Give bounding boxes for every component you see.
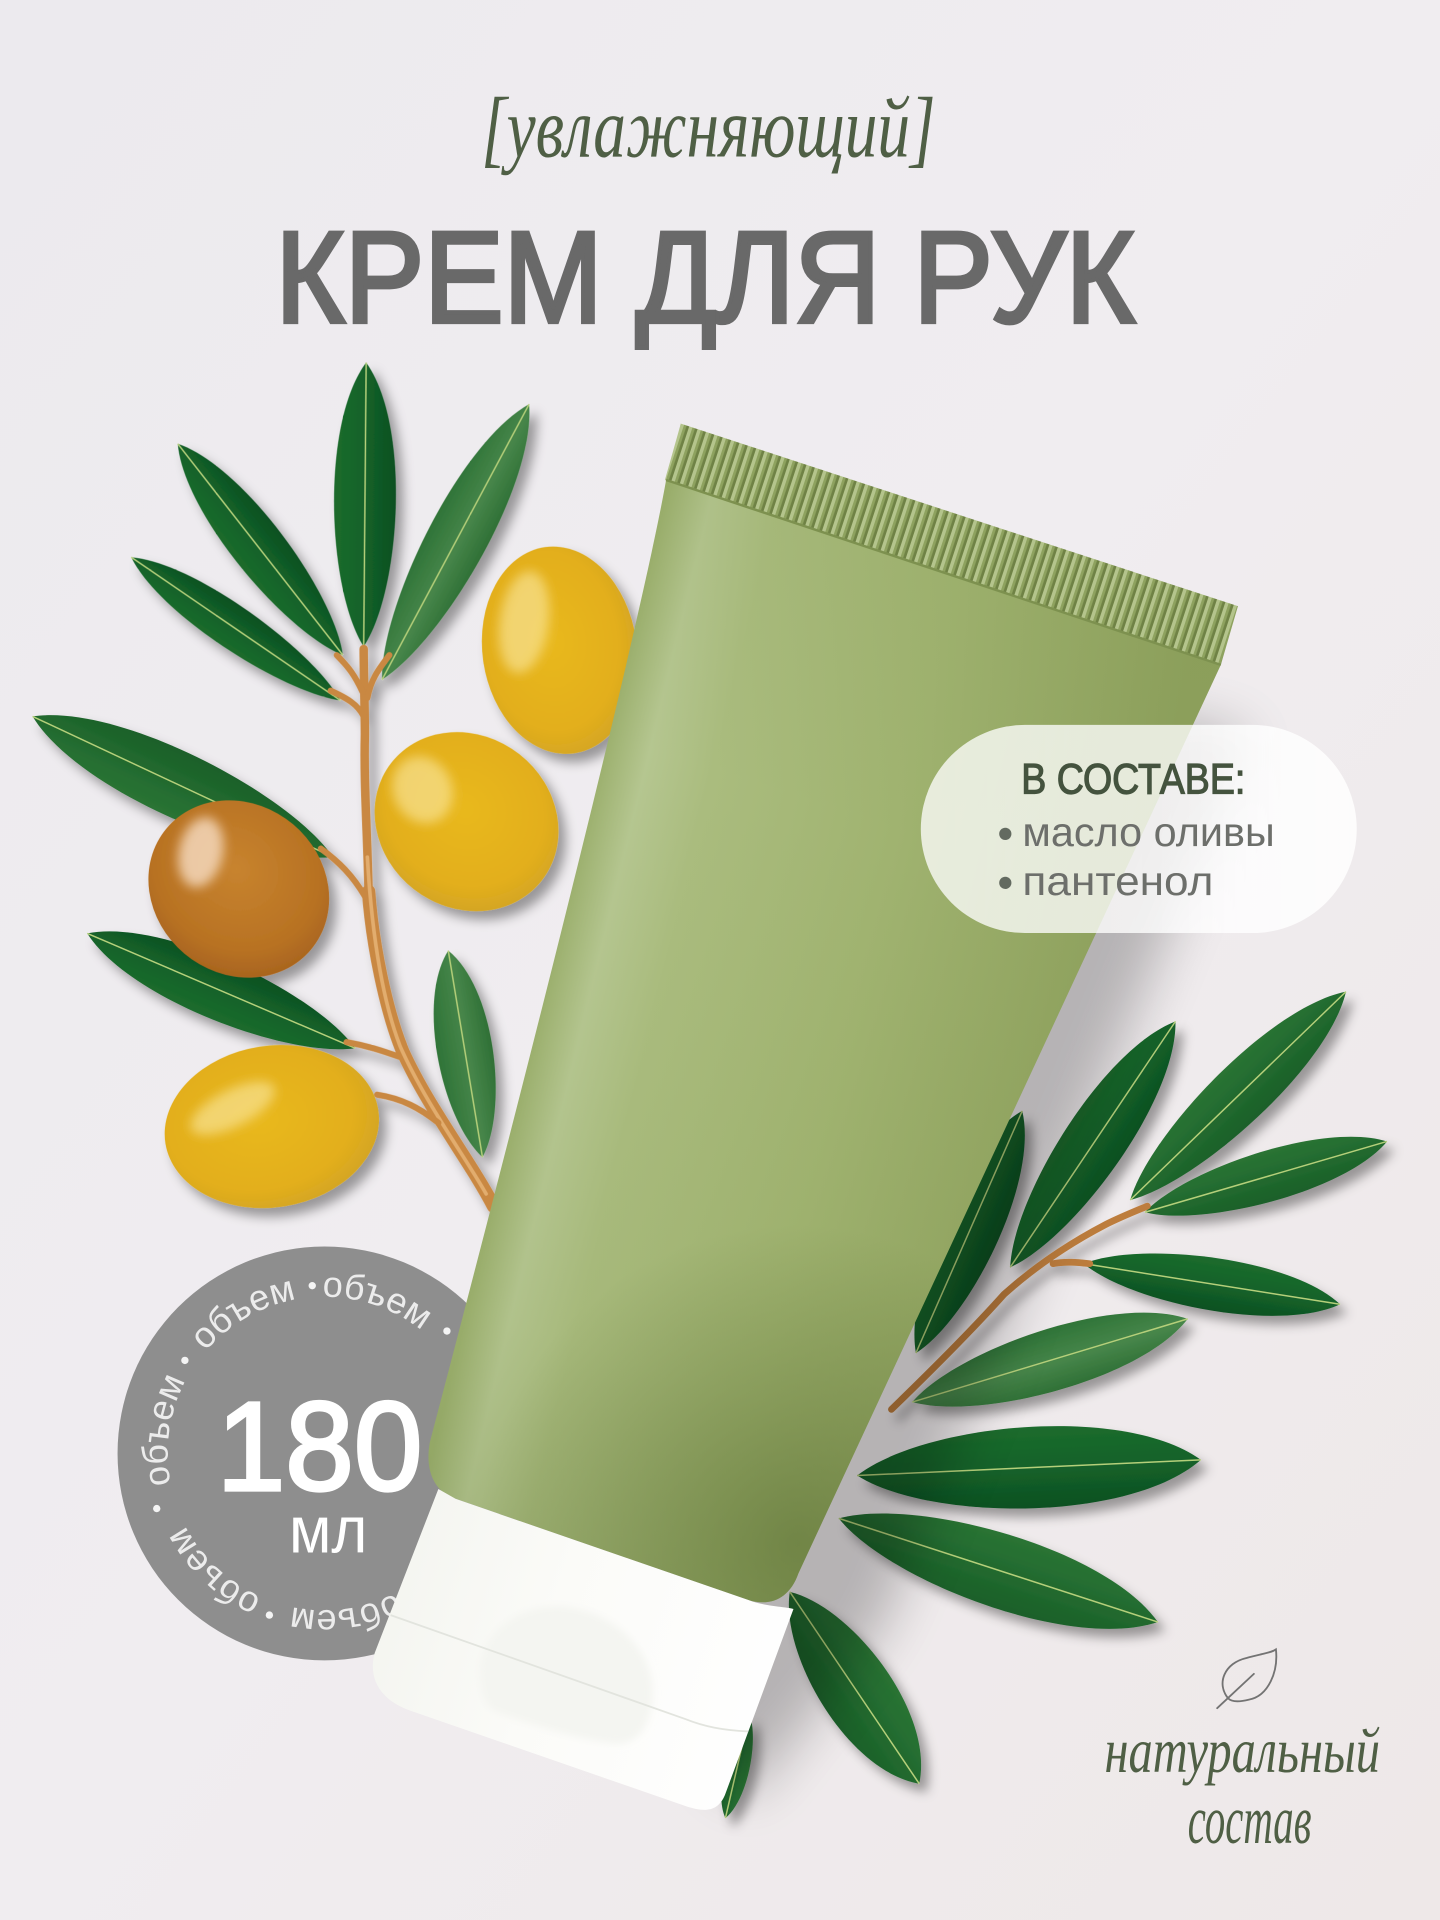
leaf: left xyxy=(119,539,353,718)
stem: left branch xyxy=(321,649,493,1206)
badge: volume 180 ml: мл xyxy=(289,1494,367,1568)
leaf: under cap xyxy=(713,1712,761,1821)
leaf: behind tube xyxy=(889,1099,1050,1365)
olive: bottom xyxy=(153,1030,391,1223)
leaf: bottom xyxy=(760,1572,949,1804)
tube cap xyxy=(373,1489,793,1810)
badge: volume 180 ml: объем xyxy=(170,1528,258,1612)
callout: ingredients: пантенол xyxy=(1022,858,1213,904)
stem: right branch xyxy=(891,1206,1147,1409)
leaf: lower xyxy=(827,1483,1169,1657)
cream tube xyxy=(428,424,1238,1602)
leaf: long left xyxy=(19,686,347,887)
cap thumb notch xyxy=(480,1606,653,1744)
leaf: upper left xyxy=(157,428,364,671)
callout: ingredients xyxy=(921,725,1357,933)
caption: natural composition: состав xyxy=(1188,1782,1311,1858)
badge: volume 180 ml: 180 xyxy=(217,1376,422,1517)
badge: volume 180 ml: объем xyxy=(196,1281,294,1348)
caption: natural composition xyxy=(1104,1715,1380,1858)
badge: volume 180 ml: объем xyxy=(292,1596,396,1632)
olive: brown xyxy=(112,764,365,1014)
tube shadow xyxy=(490,637,1249,1800)
leaf: pale middle xyxy=(903,1289,1197,1432)
leaf: top centre xyxy=(333,362,397,647)
olive branch: right xyxy=(713,971,1394,1821)
icon: leaf outline xyxy=(1217,1649,1276,1708)
olive: top right xyxy=(469,536,650,764)
leaf: small right xyxy=(421,946,510,1162)
leaf: far right xyxy=(1138,1117,1394,1237)
leaf: lower left xyxy=(75,906,367,1076)
leaf: right middle xyxy=(1080,1238,1344,1330)
olive branch: left xyxy=(19,362,650,1223)
leaf: upper right tip xyxy=(1110,971,1366,1221)
callout: ingredients: В СОСТАВЕ: xyxy=(1021,755,1245,803)
olive: middle xyxy=(338,695,595,948)
badge: volume 180 ml xyxy=(118,1246,520,1660)
leaf: upper right xyxy=(356,390,555,694)
subtitle: увлажняющий: [увлажняющий] xyxy=(481,81,936,176)
leaf: upper middle xyxy=(985,1004,1201,1285)
badge: volume 180 ml: объем xyxy=(324,1274,430,1329)
callout: ingredients: масло оливы xyxy=(1022,809,1275,855)
title: крем для рук: КРЕМ ДЛЯ РУК xyxy=(276,205,1135,350)
leaf: wide middle xyxy=(855,1419,1203,1516)
tube crimp xyxy=(665,424,1238,665)
badge: volume 180 ml: объем xyxy=(141,1375,184,1485)
tube body xyxy=(428,480,1221,1602)
